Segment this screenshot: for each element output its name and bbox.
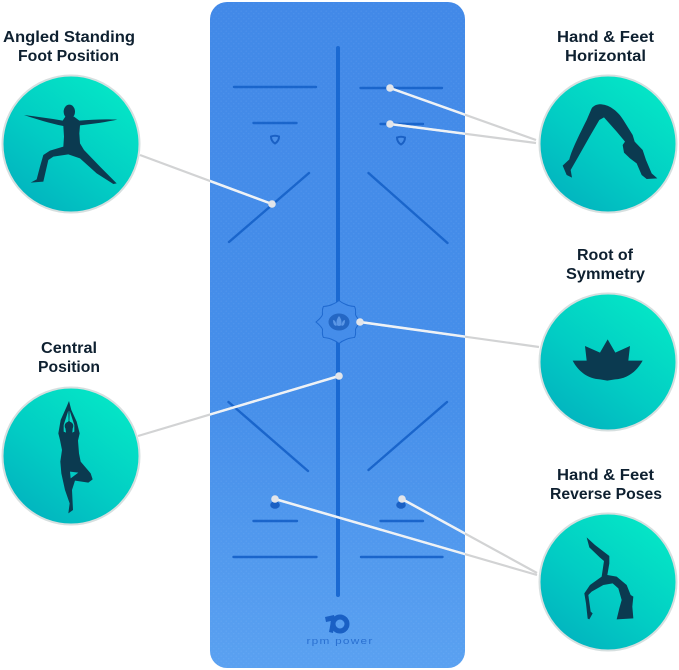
icon: tree pose (58, 401, 93, 513)
icon: lower right foot mark (396, 501, 406, 509)
badge circle (540, 76, 676, 212)
heading: Hand & Feet (557, 467, 654, 484)
icon: upper left shield mark (271, 136, 279, 144)
icon: warrior pose (24, 105, 117, 184)
heading: Central (41, 340, 97, 357)
leader lines outside mat (138, 88, 539, 575)
icon: downward dog pose (563, 104, 657, 179)
yoga mat (210, 2, 465, 668)
badge circle (540, 294, 676, 430)
heading: Hand & Feet (557, 29, 654, 46)
icon: upper right shield mark (397, 137, 405, 144)
heading: Reverse Poses (550, 486, 662, 503)
brand logo (306, 615, 374, 647)
icon: backbend pose (584, 537, 633, 619)
heading: Position (38, 359, 100, 376)
heading: Horizontal (565, 48, 646, 65)
badge circle (2, 76, 140, 212)
icon: lower left foot mark (270, 501, 280, 509)
heading: Root of (577, 247, 634, 264)
icon: lotus flower (573, 339, 643, 381)
centre alignment line (336, 48, 340, 595)
panel: hand and feet reverse poses (540, 467, 676, 650)
panel: hand and feet horizontal (540, 29, 676, 212)
badge circle (2, 388, 140, 524)
badge circle (540, 514, 676, 650)
heading: Symmetry (566, 266, 645, 283)
upper and lower alignment marks (228, 87, 448, 557)
panel: root of symmetry (540, 247, 676, 430)
heading: Angled Standing (3, 29, 135, 46)
panel: angled standing foot position (2, 29, 140, 212)
leader end points (268, 84, 406, 503)
icon: lotus emblem (316, 300, 361, 344)
heading: Foot Position (18, 48, 119, 65)
brand logo: rpm power (306, 636, 374, 647)
panel: central position (2, 340, 140, 524)
leader lines on mat (210, 88, 465, 556)
